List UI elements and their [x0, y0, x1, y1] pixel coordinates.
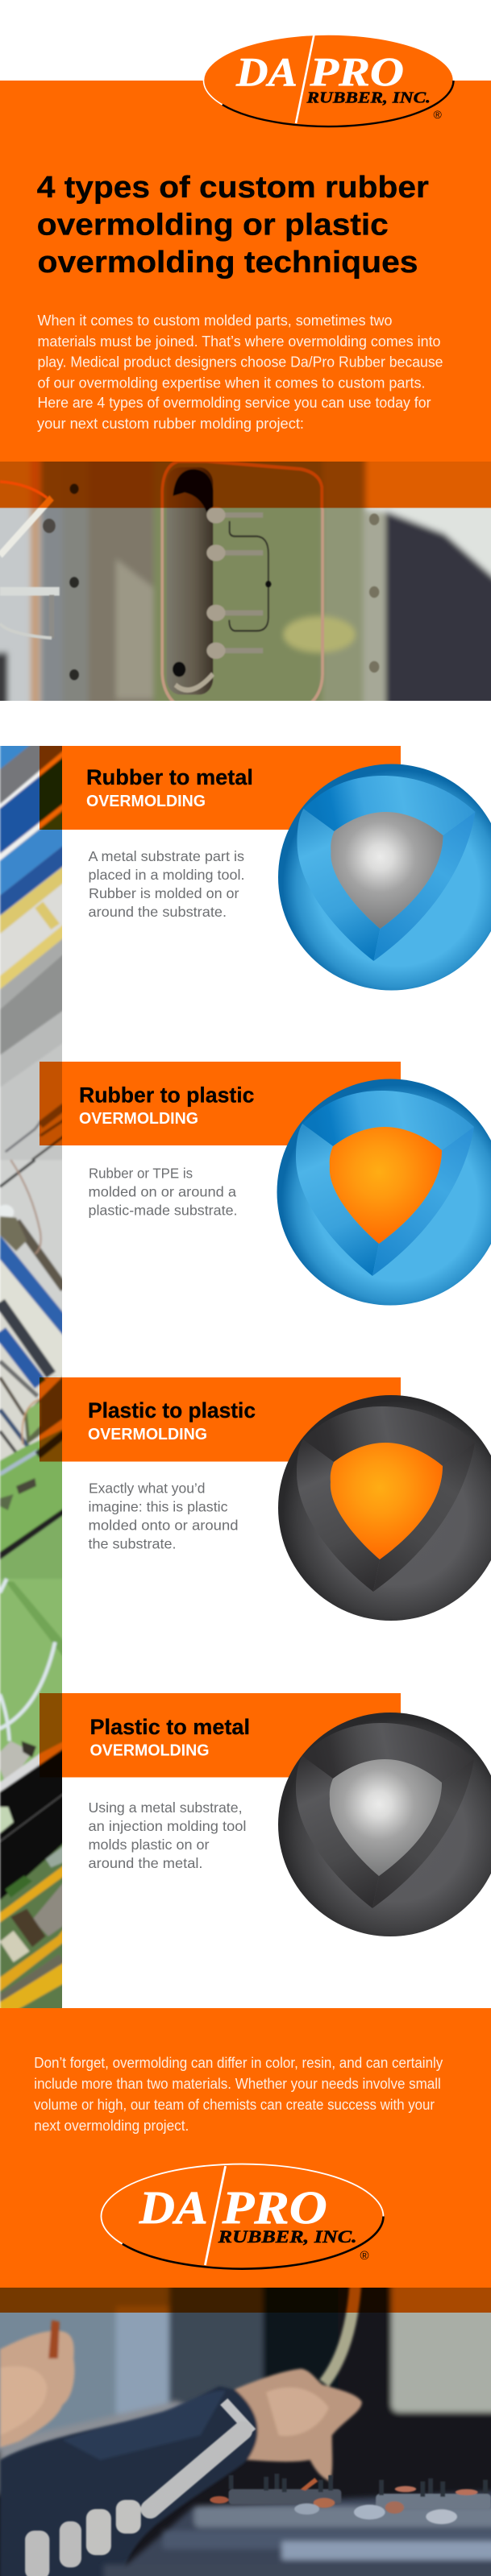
intro text: play. Medical product designers choose Da/Pro Rubber because: [37, 354, 443, 370]
icon: black disc with orange core: [278, 1395, 491, 1621]
description: imagine: this is plastic: [89, 1498, 228, 1514]
description: [89, 1166, 237, 1219]
intro text: materials must be joined. That’s where overmolding comes into: [37, 333, 440, 350]
heading bar: Rubber to metal: [86, 765, 253, 789]
intro text: Here are 4 types of overmolding service you can use today for: [37, 395, 431, 411]
title: [37, 171, 429, 280]
closing text: Don’t forget, overmolding can differ in color, resin, and can certainly: [34, 2055, 443, 2071]
description: [89, 1799, 247, 1871]
logo: Da/Pro Rubber header: [203, 35, 453, 126]
icon: blue disc with metal core: [278, 764, 491, 991]
logo: Da/Pro Rubber header: RUBBER, INC.: [306, 89, 431, 106]
description: plastic-made substrate.: [89, 1203, 237, 1219]
bar overlay on photo: [40, 1693, 62, 1777]
description: placed in a molding tool.: [89, 867, 245, 883]
photo overlay: orange band: [0, 2288, 491, 2313]
panel: orange footer: [0, 2008, 491, 2288]
strip section: blue beam and green machine: [0, 1160, 64, 1579]
heading bar: [62, 1377, 401, 1461]
title: overmolding or plastic: [37, 209, 389, 242]
title: overmolding techniques: [37, 246, 418, 280]
description: molds plastic on or: [89, 1837, 210, 1853]
intro text: [37, 313, 443, 432]
panel: rubber to plastic: [40, 1062, 491, 1305]
icon: black disc with metal core: [278, 1713, 491, 1936]
strip section: blue and yellow beams: [0, 741, 64, 1160]
heading bar: [62, 1693, 401, 1777]
photo: hands placing parts on a tray: [0, 2272, 491, 2576]
description: Exactly what you’d: [89, 1481, 205, 1497]
bar overlay on photo: [40, 746, 62, 830]
strip section: black beam and yellow rails: [0, 1579, 64, 2011]
photo overlay: orange band: [0, 462, 491, 507]
description: the substrate.: [89, 1535, 176, 1551]
description: around the metal.: [89, 1855, 203, 1871]
description: A metal substrate part is: [89, 848, 244, 864]
photo: mold tool with pins: [0, 462, 491, 701]
description: around the substrate.: [89, 904, 227, 920]
logo: Da/Pro Rubber header: PRO: [309, 50, 404, 95]
panel: orange header: [0, 35, 491, 462]
closing text: volume or high, our team of chemists can create success with your: [34, 2097, 435, 2113]
intro text: your next custom rubber molding project:: [37, 416, 304, 432]
heading bar: [62, 746, 401, 830]
heading bar: Plastic to metal: [90, 1715, 250, 1739]
description: [89, 1481, 239, 1551]
heading bar: OVERMOLDING: [88, 1426, 207, 1443]
panel: plastic to plastic: [40, 1377, 491, 1621]
logo: Da/Pro Rubber footer: RUBBER, INC.: [218, 2226, 357, 2247]
panel: rubber to metal: [40, 746, 491, 991]
panel: plastic to metal: [40, 1693, 491, 1936]
closing text: include more than two materials. Whether your needs involve small: [34, 2076, 441, 2092]
logo: Da/Pro Rubber footer: PRO: [222, 2181, 327, 2234]
description: Rubber is molded on or: [89, 885, 239, 901]
description: [89, 848, 245, 920]
description: molded on or around a: [89, 1183, 236, 1199]
heading bar: OVERMOLDING: [90, 1742, 210, 1760]
intro text: When it comes to custom molded parts, sometimes two: [37, 313, 392, 329]
logo: Da/Pro Rubber footer: DA: [139, 2181, 208, 2234]
logo: Da/Pro Rubber footer: ®: [360, 2249, 369, 2263]
heading bar: Rubber to plastic: [79, 1083, 255, 1107]
logo: Da/Pro Rubber header: DA: [235, 50, 298, 95]
bar overlay on photo: [40, 1062, 62, 1145]
heading bar: Plastic to plastic: [88, 1398, 256, 1423]
closing text: next overmolding project.: [34, 2118, 189, 2134]
logo: Da/Pro Rubber footer: [102, 2164, 384, 2269]
intro text: of our overmolding expertise when it comes to custom parts.: [37, 375, 426, 391]
closing text: [34, 2055, 443, 2134]
description: an injection molding tool: [89, 1818, 247, 1834]
title: 4 types of custom rubber: [37, 171, 429, 205]
bar overlay on photo: [40, 1377, 62, 1461]
icon: blue disc with orange core: [277, 1079, 491, 1305]
photo strip: machinery: [0, 741, 64, 2011]
heading bar: OVERMOLDING: [86, 793, 206, 810]
heading bar: OVERMOLDING: [79, 1110, 198, 1128]
heading bar: [62, 1062, 401, 1145]
description: Using a metal substrate,: [89, 1799, 242, 1816]
description: Rubber or TPE is: [89, 1166, 193, 1182]
description: molded onto or around: [89, 1517, 239, 1533]
logo: Da/Pro Rubber header: ®: [434, 108, 442, 121]
